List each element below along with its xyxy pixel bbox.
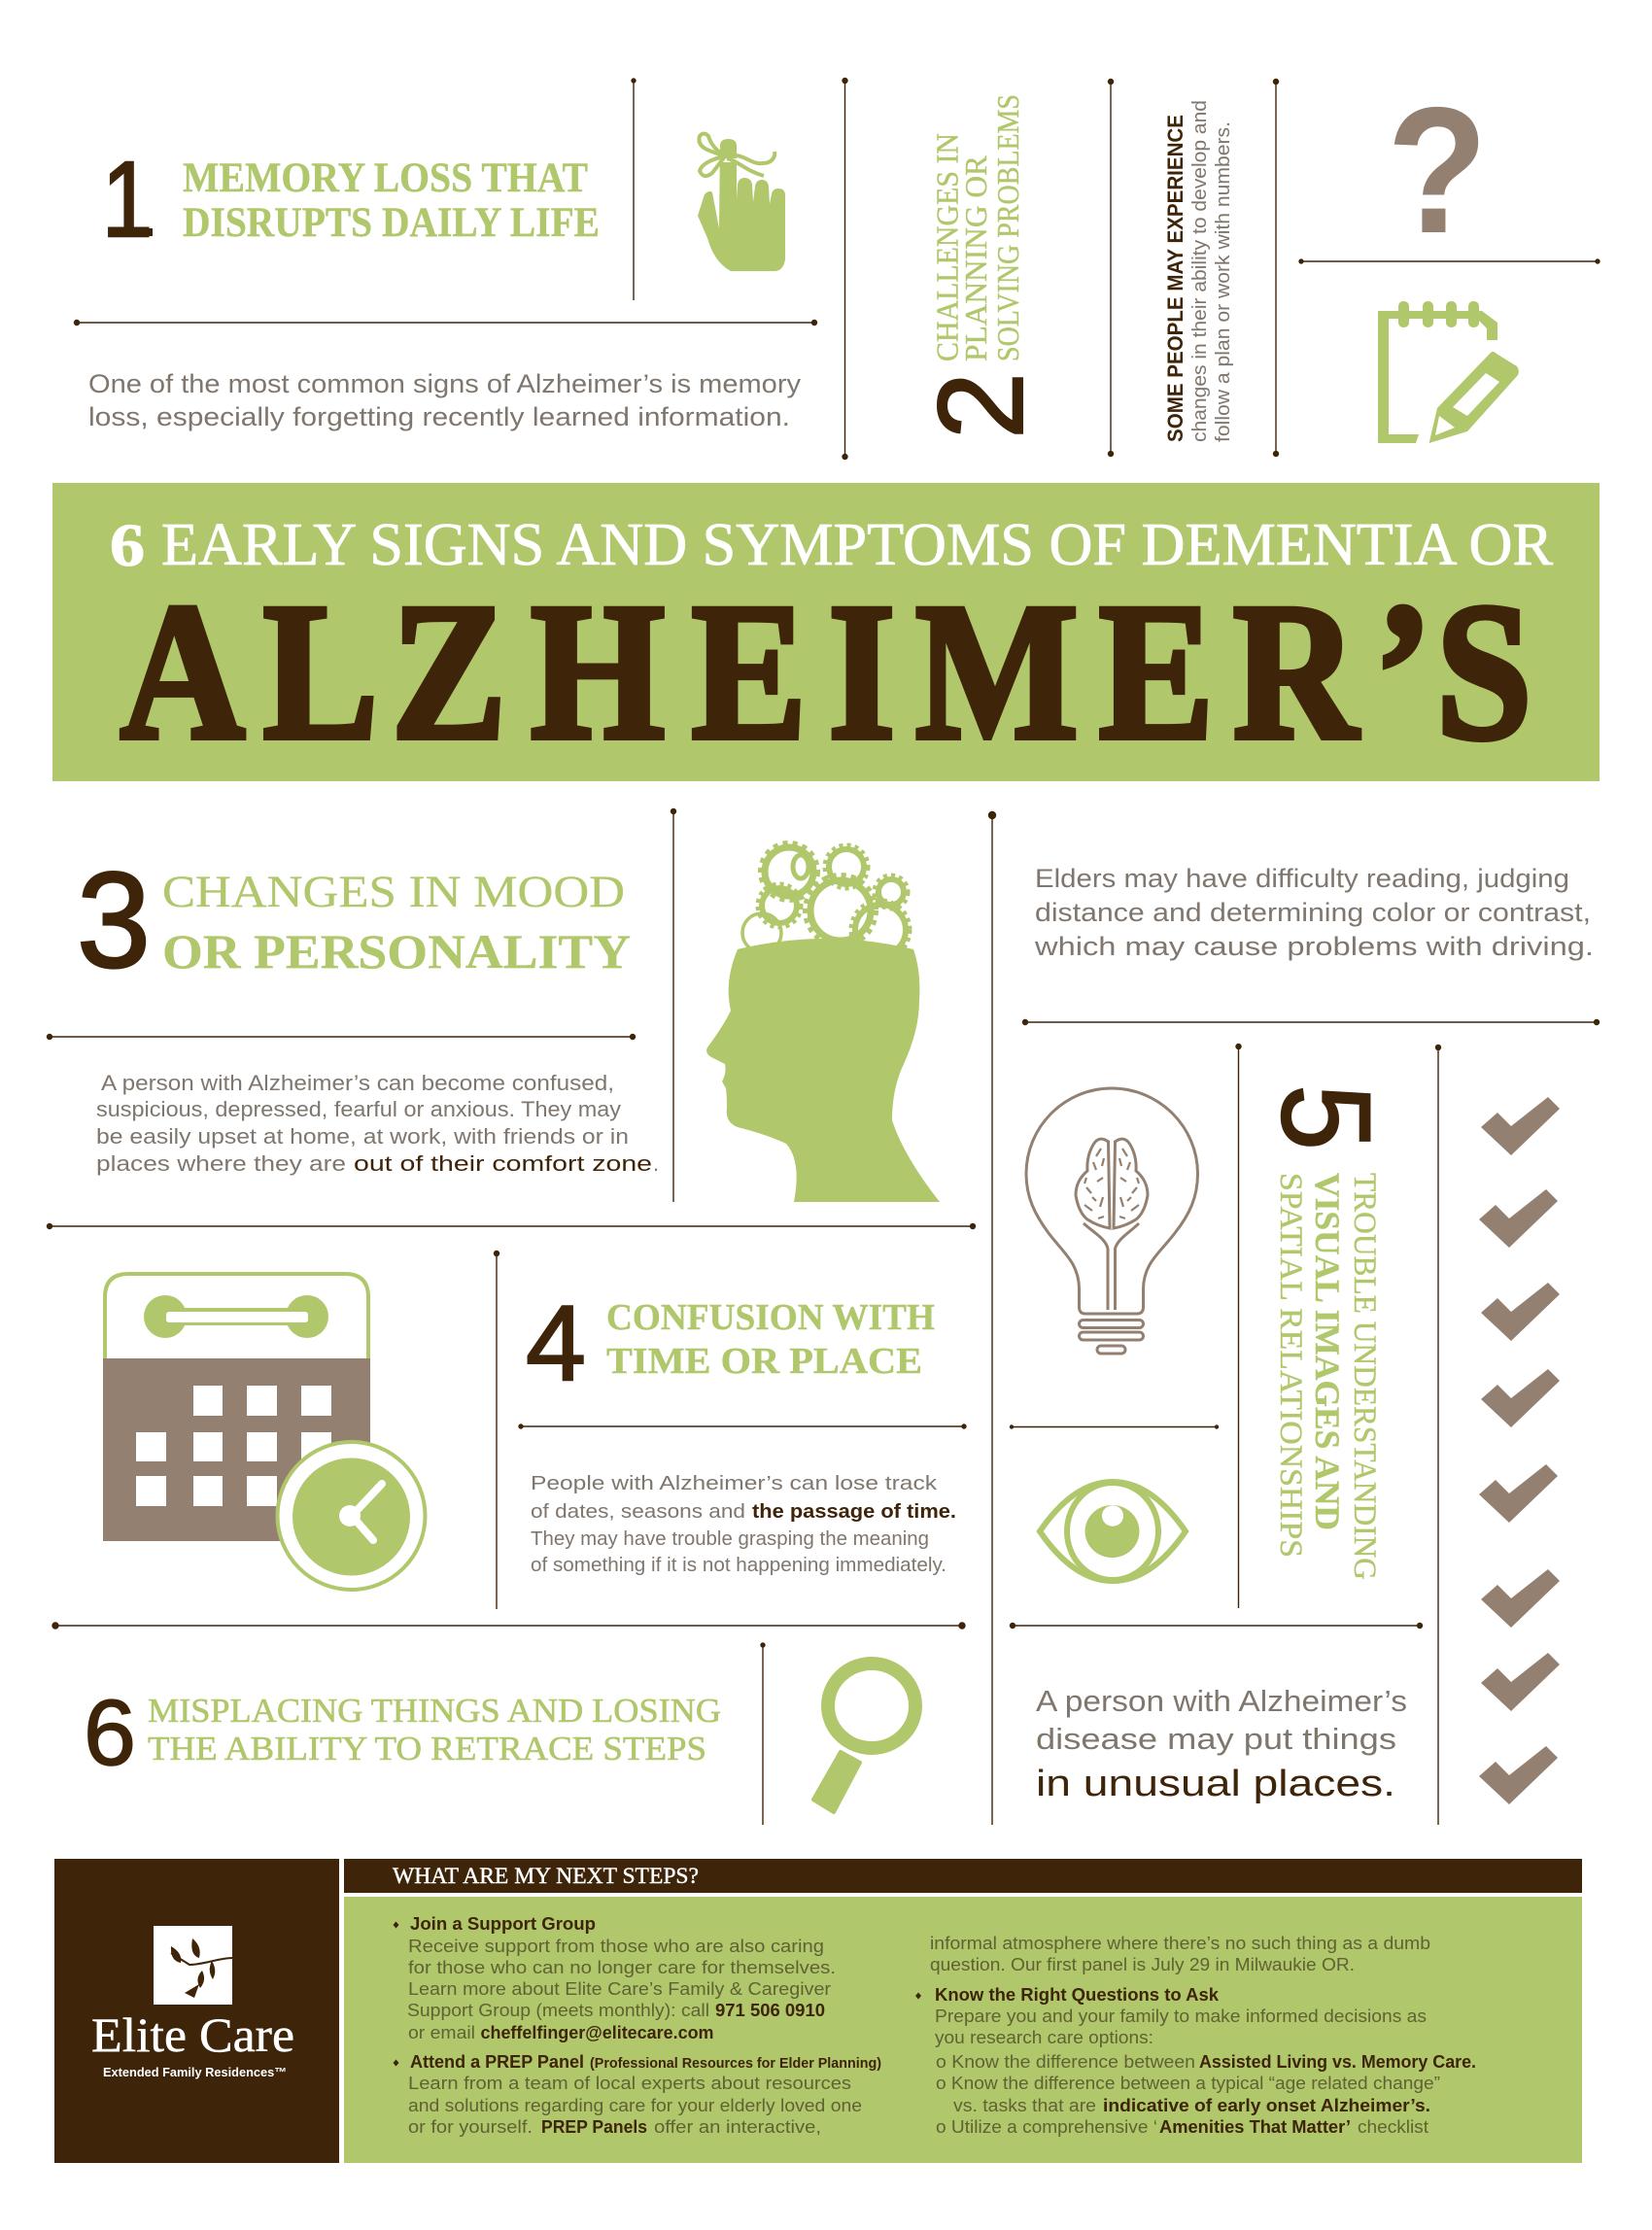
logo tagline: Extended Family Residences™	[103, 2065, 287, 2079]
heading: misplacing things and losing the ability to retrace steps: THE ABILITY TO RETRACE STEPS	[148, 1730, 706, 1767]
body text: out of their comfort zone	[354, 1151, 652, 1176]
logo panel: Elite Care	[54, 1859, 339, 2163]
body text: distance and determining color or contrast,	[1035, 898, 1591, 927]
title line 1: EARLY SIGNS AND SYMPTOMS OF DEMENTIA OR	[161, 512, 1554, 578]
icon: eye	[1040, 1482, 1186, 1581]
panel: sign 6 misplacing things	[84, 1664, 1407, 1812]
right column text: question. Our first panel is July 29 in Milwaukie OR.	[930, 1954, 1355, 1974]
body text: A person with Alzheimer’s can become confused,	[101, 1071, 614, 1095]
right column text: Prepare you and your family to make informed decisions as	[935, 2006, 1427, 2026]
left column text: (Professional Resources for Elder Planning)	[590, 2055, 881, 2072]
body text: One of the most common signs of Alzheimer’s is memory	[88, 369, 802, 398]
icon: column of check marks	[1479, 1097, 1560, 1804]
body text rotated: follow a plan or work with numbers.	[1213, 121, 1234, 442]
left column text: Support Group (meets monthly): call	[407, 2000, 709, 2020]
heading: challenges in planning or solving problems: PLANNING OR	[958, 154, 993, 361]
heading: confusion with time or place: CONFUSION WITH	[606, 1297, 935, 1338]
body text	[96, 1071, 659, 1176]
heading: memory loss that disrupts daily life: DISRUPTS DAILY LIFE	[183, 200, 600, 246]
icon: hand with ribbon on finger	[698, 134, 785, 271]
logo wordmark: Elite Care	[91, 2007, 294, 2062]
icon: leaf logo	[154, 1926, 232, 2005]
heading: changes in mood or personality: CHANGES IN MOOD	[162, 867, 625, 917]
left column text: for those who can no longer care for themselves.	[408, 1957, 836, 1977]
heading: confusion with time or place	[606, 1297, 935, 1382]
body text	[531, 1473, 956, 1576]
body text: loss, especially forgetting recently learned information.	[88, 402, 790, 431]
number 3: 3	[77, 843, 151, 996]
body text: of something if it is not happening immediately.	[531, 1555, 946, 1576]
heading: challenges in planning or solving problems: CHALLENGES IN	[929, 133, 964, 361]
body text rotated: changes in their ability to develop and	[1189, 100, 1211, 442]
heading: confusion with time or place: TIME OR PLACE	[606, 1341, 922, 1382]
body text: which may cause problems with driving.	[1034, 932, 1594, 961]
panel: sign 2 challenges in planning	[914, 71, 1519, 443]
heading: changes in mood or personality	[162, 867, 631, 978]
left column text: Receive support from those who are also caring	[408, 1936, 824, 1956]
body text: Elders may have difficulty reading, judging	[1035, 864, 1569, 893]
left column text: or for yourself.	[408, 2116, 533, 2137]
body text: the passage of time.	[752, 1501, 956, 1523]
left column text: Attend a PREP Panel	[410, 2051, 584, 2072]
panel: sign 1 memory loss	[88, 134, 802, 431]
heading bar	[344, 1859, 1582, 1893]
left column text	[393, 1913, 881, 2137]
panel: what are my next steps	[344, 1859, 1582, 2163]
body text rotated	[1163, 100, 1234, 442]
title line 2: ALZHEIMER’S	[120, 564, 1532, 781]
right column text	[915, 1933, 1476, 2137]
right column text: indicative of early onset Alzheimer’s.	[1103, 2095, 1430, 2115]
right column text: o Know the difference between a typical “age related change”	[936, 2073, 1440, 2093]
heading: challenges in planning or solving problems: SOLVING PROBLEMS	[990, 94, 1025, 361]
icon: light bulb with brain	[1026, 1088, 1197, 1354]
number 5 rotated: 5	[1256, 1084, 1397, 1150]
right column text: Amenities That Matter’	[1159, 2116, 1351, 2137]
right column text: o Know the difference between	[936, 2051, 1195, 2072]
heading: changes in mood or personality: OR PERSONALITY	[162, 924, 631, 978]
icon: notepad and pencil	[1378, 301, 1519, 443]
icon: calendar with clock	[103, 1274, 426, 1590]
panel: sign 3 changes in mood	[77, 843, 940, 1202]
body text: disease may put things	[1036, 1722, 1396, 1756]
icon: magnifying glass	[813, 1664, 915, 1812]
heading: misplacing things and losing the ability to retrace steps	[148, 1692, 721, 1767]
right column text: you research care options:	[935, 2027, 1153, 2047]
panel: sign 4 confusion with time or place	[103, 1274, 956, 1590]
right column text: vs. tasks that are	[953, 2095, 1096, 2115]
left column text: PREP Panels	[541, 2116, 647, 2137]
left column text: cheffelfinger@elitecare.com	[480, 2022, 713, 2042]
heading: memory loss that disrupts daily life: MEMORY LOSS THAT	[183, 155, 588, 201]
right column text: o Utilize a comprehensive ‘	[936, 2116, 1157, 2137]
body text: in unusual places.	[1036, 1764, 1395, 1804]
left column text: and solutions regarding care for your elderly loved one	[408, 2095, 862, 2115]
heading: trouble understanding visual images and spatial relationships: TROUBLE UNDERSTANDING	[1347, 1173, 1382, 1580]
number 2 rotated: 2	[914, 372, 1049, 439]
left column text: Learn more about Elite Care’s Family & Caregiver	[408, 1978, 831, 1999]
heading: misplacing things and losing the ability to retrace steps: MISPLACING THINGS AND LOSING	[148, 1692, 721, 1730]
title line 1: 6	[110, 513, 145, 579]
left column text: or email	[408, 2022, 475, 2042]
body text: suspicious, depressed, fearful or anxious. They may	[96, 1097, 621, 1121]
right column text: informal atmosphere where there’s no such thing as a dumb	[930, 1933, 1430, 1953]
body text: People with Alzheimer’s can lose track	[531, 1473, 938, 1494]
heading: trouble understanding visual images and spatial relationships	[1273, 1173, 1382, 1580]
left column text: 971 506 0910	[715, 2000, 825, 2020]
icon: head silhouette with gears	[706, 843, 940, 1202]
left column text: Learn from a team of local experts about resources	[408, 2073, 851, 2093]
heading: memory loss that disrupts daily life	[183, 155, 600, 246]
panel: sign 5 visual images	[1026, 864, 1594, 1804]
heading: trouble understanding visual images and spatial relationships: SPATIAL RELATIONSHIPS	[1273, 1173, 1308, 1558]
body text: .	[653, 1151, 659, 1176]
body text rotated: SOME PEOPLE MAY EXPERIENCE	[1163, 115, 1187, 442]
heading bar: WHAT ARE MY NEXT STEPS?	[393, 1864, 699, 1888]
body text	[1034, 864, 1594, 961]
number 6: 6	[84, 1681, 136, 1785]
heading: trouble understanding visual images and spatial relationships: VISUAL IMAGES AND	[1308, 1173, 1347, 1530]
right column text: Know the Right Questions to Ask	[935, 1984, 1220, 2005]
body text: of dates, seasons and	[531, 1501, 745, 1523]
body text: places where they are	[96, 1151, 346, 1176]
body text: be easily upset at home, at work, with friends or in	[96, 1124, 629, 1149]
heading: challenges in planning or solving problems	[929, 94, 1025, 361]
body text	[88, 369, 802, 431]
right column text: Assisted Living vs. Memory Care.	[1199, 2051, 1476, 2072]
left column text: offer an interactive,	[654, 2116, 821, 2137]
body text: They may have trouble grasping the meaning	[531, 1528, 929, 1550]
icon: question mark: ?	[1387, 71, 1488, 271]
body text	[1036, 1684, 1407, 1804]
right column text: checklist	[1358, 2116, 1428, 2137]
body text: A person with Alzheimer’s	[1036, 1684, 1407, 1718]
number 1: 1	[102, 140, 153, 259]
left column text: Join a Support Group	[410, 1913, 596, 1934]
number 4: 4	[526, 1284, 586, 1403]
title banner	[52, 483, 1600, 781]
